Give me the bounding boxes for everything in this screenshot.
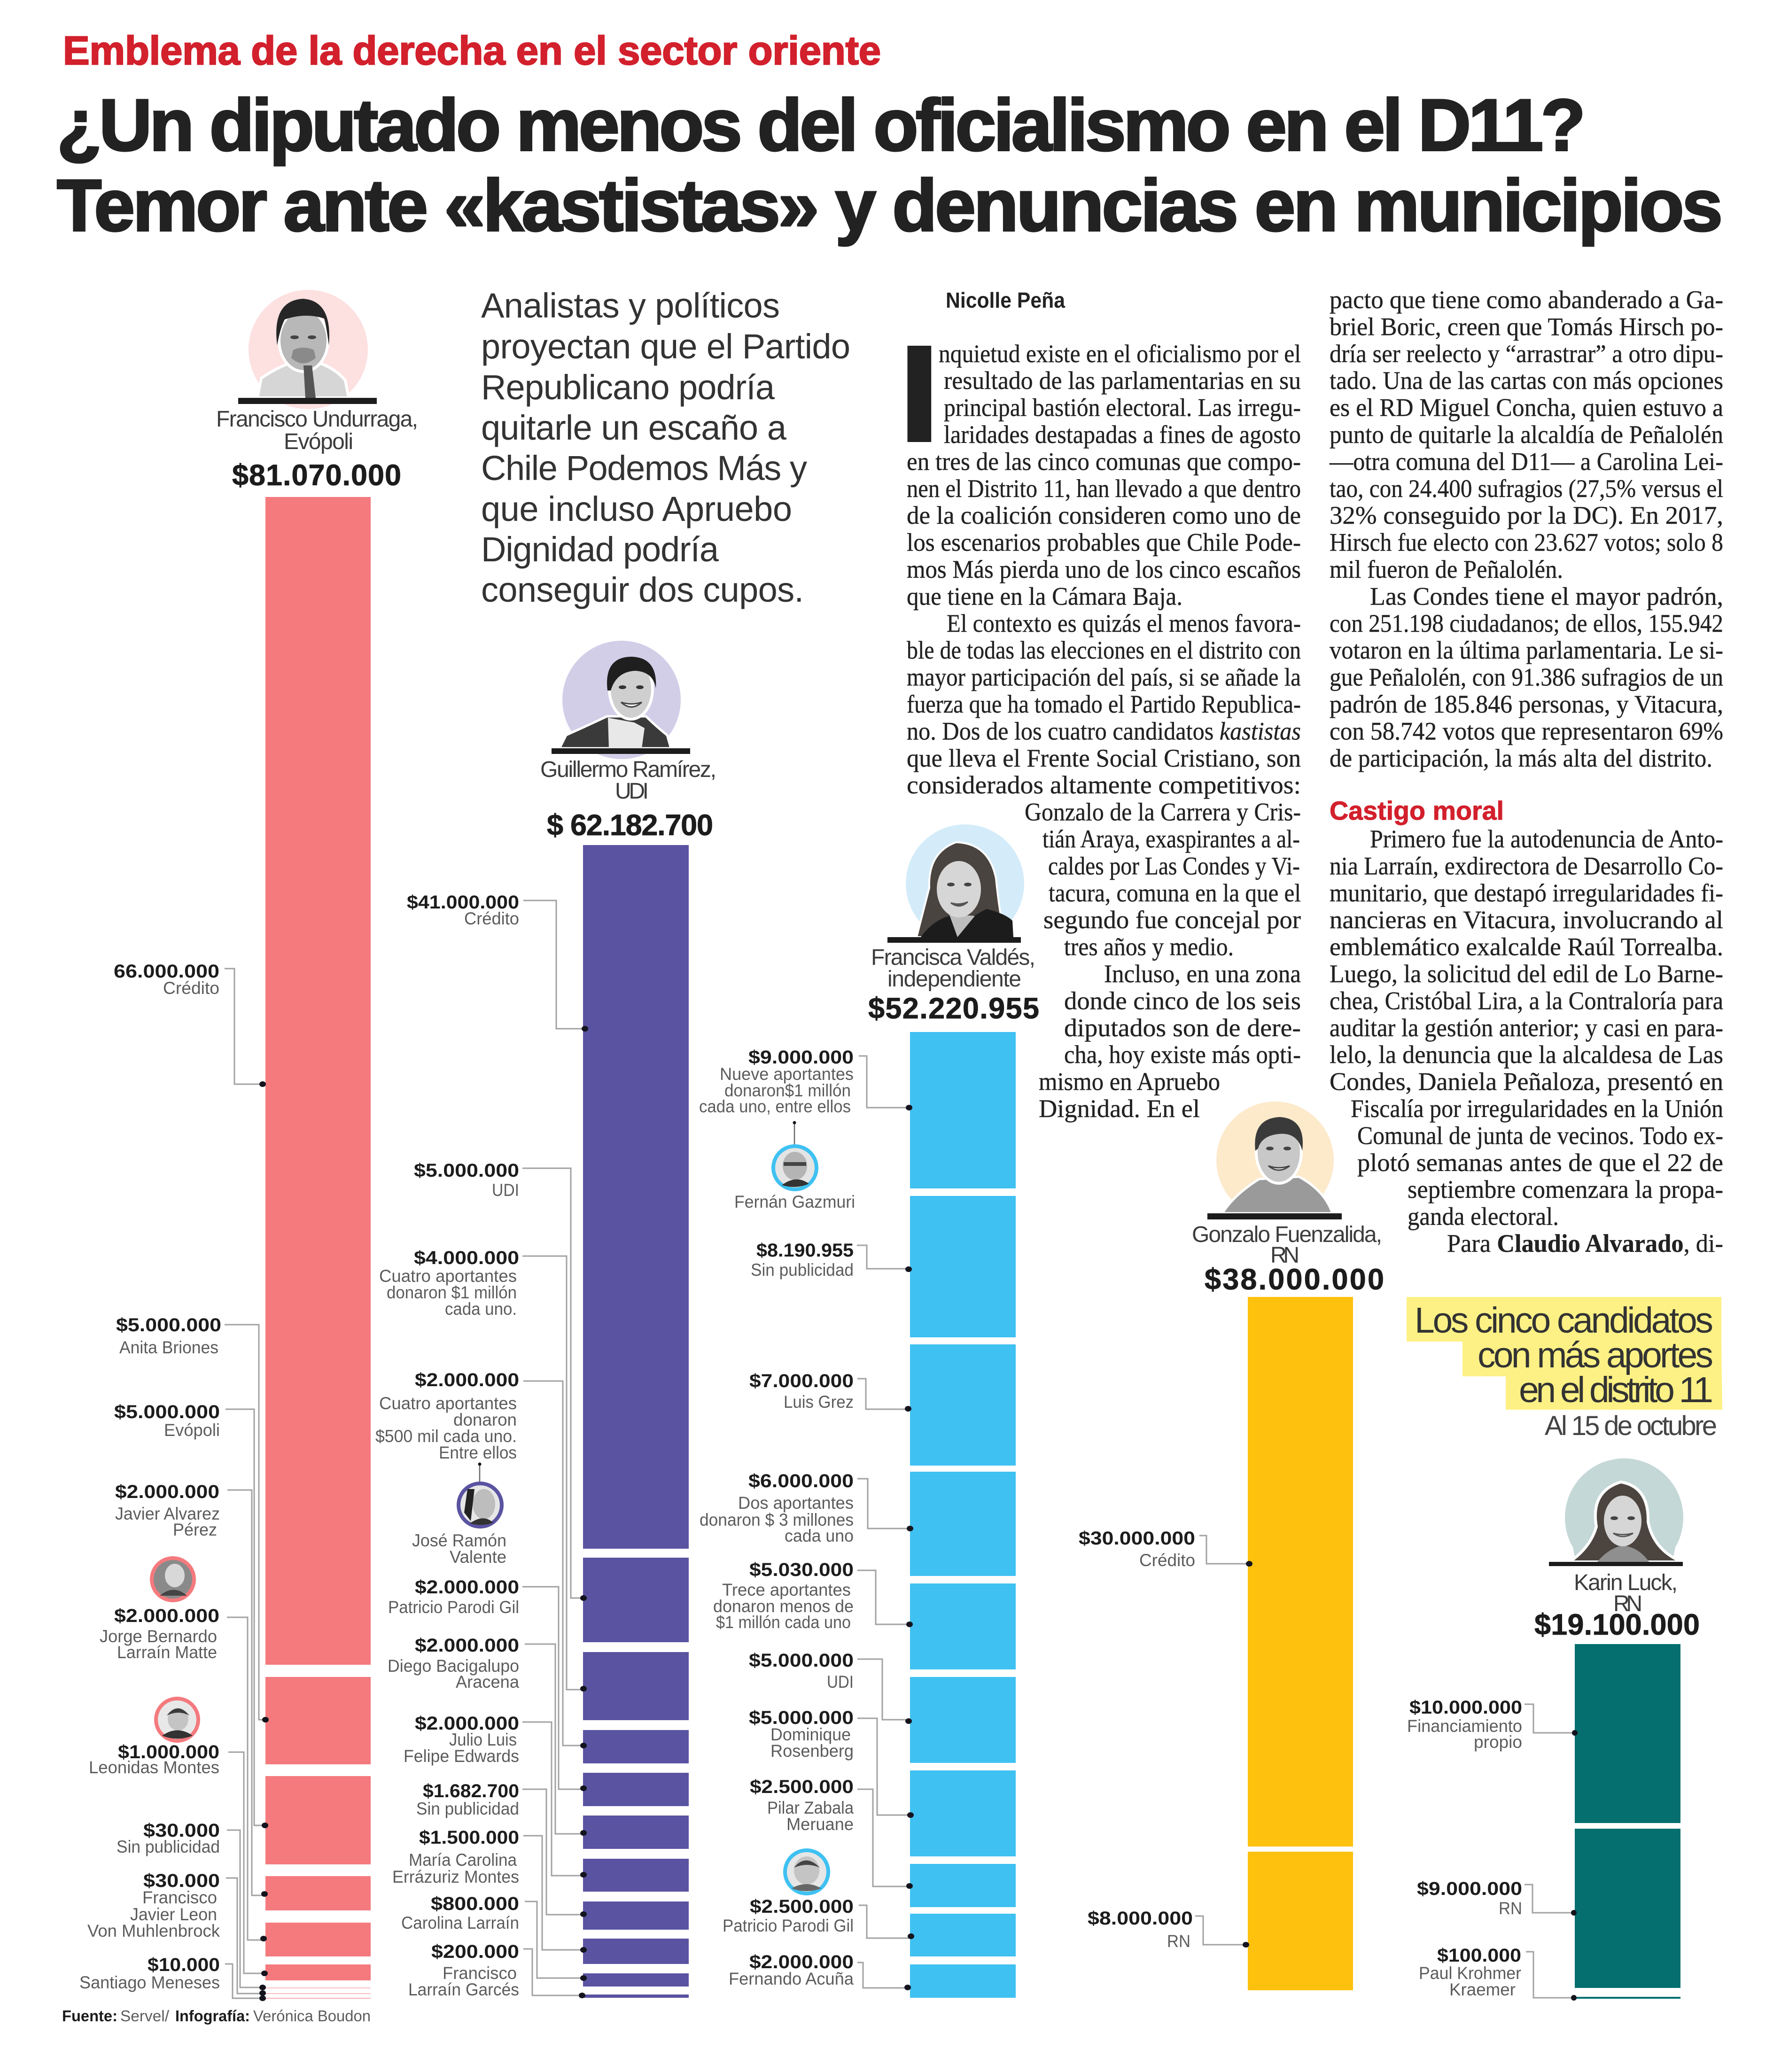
callout: cuatro aportantes $500 mil: Cuatro aportantes: [379, 1394, 517, 1413]
callout: dos aportantes: $6.000.000: [748, 1471, 854, 1491]
name: [871, 945, 1035, 992]
callout: crédito: Crédito: [1139, 1551, 1195, 1570]
callout: nueve aportantes: [699, 1047, 912, 1116]
kicker: Emblema de la derecha en el sector oriente: [63, 29, 881, 73]
article column 1: Dignidad. En el: [1039, 1094, 1200, 1123]
article column 1: los escenarios probables que Chile Pode-: [907, 528, 1301, 557]
intro text block: Republicano podría: [481, 368, 775, 407]
callout: Paul Krohmer Kraemer: [1419, 1945, 1577, 2001]
callout: María Carolina Errázuriz Montes: María Carolina: [409, 1850, 517, 1870]
source credit: Fuente:: [62, 2007, 117, 2025]
callout: sin publicidad: $8.190.955: [756, 1240, 854, 1261]
callout: Sin publicidad: [117, 1820, 266, 1990]
callout: Anita Briones: $5.000.000: [116, 1315, 221, 1335]
callout: crédito: $41.000.000: [407, 892, 519, 913]
article column 1: diputados son de dere-: [1064, 1014, 1301, 1042]
article column 2: 32% conseguido por la DC). En 2017,: [1330, 501, 1723, 529]
source credit: Infografía:: [175, 2007, 250, 2025]
stacked bar: Luck: [1575, 1644, 1680, 1999]
article column 1: Incluso, en una zona: [1104, 960, 1301, 988]
intro text block: [481, 286, 850, 609]
intro text block: Dignidad podría: [481, 530, 719, 569]
callout: Patricio Parodi Gil: $2.500.000: [750, 1896, 854, 1917]
icon: donor photo Leonidas Montes: [154, 1697, 200, 1743]
panel: Karin Luck: [1407, 1459, 1700, 2001]
callout: Patricio Parodi Gil: Patricio Parodi Gil: [723, 1916, 854, 1935]
article column 1: tres años y medio.: [1064, 933, 1234, 961]
callout: Pilar Zabala Meruane: Meruane: [786, 1815, 854, 1834]
callout: Julio Luis Felipe Edwards: [404, 1713, 587, 1878]
callout: Leonidas Montes: Leonidas Montes: [89, 1758, 219, 1777]
callout: Julio Luis Felipe Edwards: Felipe Edwards: [404, 1746, 519, 1766]
callout: Luis Grez: [749, 1371, 911, 1412]
callout: Patricio Parodi Gil: [723, 1896, 914, 1939]
panel: Francisca Valdés: [699, 824, 1039, 1998]
callout: Evópoli: $5.000.000: [114, 1402, 220, 1422]
callout: dos aportantes: cada uno: [785, 1526, 854, 1545]
callout: Anita Briones: [116, 1315, 269, 1723]
chart heading with highlight: Los cinco candidatos: [1415, 1300, 1713, 1341]
stacked bar: Fuenzalida: [1248, 1297, 1353, 1990]
total amount: $38.000.000: [1205, 1263, 1384, 1296]
article column 2: emblemático exalcalde Raúl Torrealba.: [1330, 933, 1723, 961]
article column 2: padrón de 185.846 personas, y Vitacura,: [1330, 690, 1723, 718]
article column 1: caldes por Las Condes y Vi-: [1048, 852, 1300, 880]
article column 1: nen el Distrito 11, han llevado a que dentro: [907, 474, 1301, 503]
callout: Jorge Bernardo Larraín Matte: $2.000.000: [114, 1606, 219, 1626]
article column 2: Luego, la solicitud del edil de Lo Barne-: [1330, 960, 1723, 988]
callout: RN: [1417, 1878, 1577, 1918]
title: Temor ante «kastistas» y denuncias en municipios: [57, 165, 1723, 247]
article column 2: Condes, Daniela Peñaloza, presentó en: [1330, 1068, 1723, 1096]
article column 1: ble de todas las elecciones en el distrito con: [907, 636, 1301, 664]
article column 1: tacura, comuna en la que el: [1049, 879, 1301, 907]
name: independiente: [887, 967, 1021, 992]
name: Francisco Undurraga,: [216, 407, 418, 432]
callout: UDI: $5.000.000: [749, 1650, 854, 1671]
name: [1192, 1222, 1382, 1268]
article column 1: considerados altamente competitivos:: [907, 771, 1301, 799]
chart heading with highlight: en el distrito 11: [1519, 1370, 1713, 1410]
article column 2: lelo, la denuncia que la alcaldesa de Las: [1330, 1040, 1723, 1069]
article column 2: de participación, la más alta del distrito.: [1330, 744, 1712, 772]
article column 2: briel Boric, creen que Tomás Hirsch po-: [1330, 312, 1723, 341]
article column 2: gue Peñalolén, con 91.386 sufragios de un: [1330, 663, 1723, 691]
name: UDI: [615, 779, 649, 804]
date note: Al 15 de octubre: [1545, 1411, 1717, 1441]
callout: Jorge Bernardo Larraín Matte: Larraín Matte: [117, 1643, 217, 1662]
article column 1: mayor participación del país, si se añade la: [907, 663, 1301, 691]
article column 2: chea, Cristóbal Lira, a la Contraloría para: [1330, 986, 1723, 1015]
icon: donor photo Patricio Parodi: [783, 1848, 830, 1895]
article column 2: dría ser reelecto y “arrastrar” a otro dipu-: [1330, 340, 1723, 368]
callout: Jorge Bernardo Larraín Matte: Jorge Bernardo: [100, 1627, 217, 1646]
title: ¿Un diputado menos del oficialismo en el D11?: [57, 85, 1586, 166]
callout: Francisco Javier Leon Von Muhlenbrock: $30.000: [143, 1870, 220, 1891]
name: Francisca Valdés,: [871, 945, 1035, 970]
callout: nueve aportantes: $9.000.000: [748, 1047, 854, 1068]
callout: Patricio Parodi Gil: $2.000.000: [415, 1577, 519, 1598]
callout: RN: $9.000.000: [1417, 1878, 1522, 1899]
portrait: Guillermo Ramírez: [552, 641, 690, 759]
callout: crédito: [1079, 1528, 1252, 1570]
article column 2: tado. Una de las cartas con más opciones: [1330, 366, 1723, 395]
callout: financiamiento propio: propio: [1474, 1732, 1522, 1752]
article column 2: munitario, que destapó irregularidades fi-: [1330, 879, 1723, 907]
callout: Sin publicidad: Sin publicidad: [416, 1799, 519, 1818]
article column 2: —otra comuna del D11— a Carolina Lei-: [1329, 447, 1723, 475]
total amount: $52.220.955: [868, 992, 1039, 1025]
article column 2: plotó semanas antes de que el 22 de: [1357, 1149, 1723, 1177]
callout: Francisco Larraín Garcés: [408, 1941, 585, 1999]
callout: Julio Luis Felipe Edwards: Julio Luis: [449, 1730, 517, 1749]
article column 2: pacto que tiene como abanderado a Ga-: [1330, 286, 1723, 314]
portrait: Karin Luck: [1549, 1459, 1683, 1566]
callout: crédito: $30.000.000: [1079, 1528, 1195, 1549]
callout: Dominique Rosenberg: $5.000.000: [749, 1707, 854, 1728]
callout: Santiago Meneses: $10.000: [148, 1955, 220, 1975]
name: Evópoli: [284, 429, 353, 454]
callout: Carolina Larraín: Carolina Larraín: [401, 1913, 519, 1932]
callout: sin publicidad: Sin publicidad: [751, 1260, 854, 1280]
callout: Francisco Javier Leon Von Muhlenbrock: Francisco: [142, 1888, 217, 1907]
callout: UDI: UDI: [827, 1672, 854, 1692]
callout: cuatro aportantes $1 millón: $4.000.000: [414, 1248, 519, 1268]
article column 1: en tres de las cinco comunas que compo-: [907, 447, 1301, 475]
subheading: Castigo moral: [1330, 796, 1504, 825]
article column 1: Gonzalo de la Carrera y Cris-: [1025, 798, 1301, 826]
article column 2: tao, con 24.400 sufragios (27,5% versus el: [1330, 474, 1723, 503]
callout: trece aportantes: $1 millón cada uno: [716, 1613, 851, 1632]
article column 2: ganda electoral.: [1408, 1203, 1559, 1231]
callout: RN: [1088, 1908, 1249, 1951]
panel: Guillermo Ramírez: [375, 641, 716, 1999]
portrait: Francisca Valdés: [887, 824, 1024, 943]
callout: Diego Bacigalupo Aracena: $2.000.000: [415, 1635, 519, 1656]
name: [216, 407, 418, 454]
callout: cuatro aportantes $1 millón: Cuatro aportantes: [379, 1266, 517, 1286]
callout: Sin publicidad: [416, 1781, 587, 1917]
callout: cuatro aportantes $1 millón: [379, 1248, 587, 1692]
article column 2: es el RD Miguel Concha, quien estuvo a: [1330, 394, 1723, 422]
callout: UDI: UDI: [492, 1180, 519, 1200]
callout: Anita Briones: Anita Briones: [119, 1338, 218, 1357]
portrait: Undurraga: [238, 290, 377, 409]
article column 1: segundo fue concejal por: [1043, 906, 1301, 934]
article column 2: mil fueron de Peñalolén.: [1330, 555, 1563, 583]
callout: Leonidas Montes: $1.000.000: [118, 1742, 219, 1762]
callout: Sin publicidad: $1.682.700: [423, 1781, 519, 1801]
callout: Pilar Zabala Meruane: [750, 1777, 913, 1889]
article column 2: con 251.198 ciudadanos; de ellos, 155.942: [1330, 609, 1723, 637]
article column 2: Para Claudio Alvarado, di-: [1447, 1229, 1723, 1257]
callout: Patricio Parodi Gil: [388, 1577, 587, 1791]
callout: Paul Krohmer Kraemer: Paul Krohmer: [1419, 1963, 1521, 1983]
source credit: Servel/: [120, 2007, 170, 2025]
callout: Fernando Acuña: [729, 1952, 911, 1990]
article column 2: Comunal de junta de vecinos. Todo ex-: [1357, 1121, 1723, 1149]
intro text block: proyectan que el Partido: [481, 327, 850, 366]
callout: financiamiento propio: [1407, 1697, 1578, 1752]
callout: María Carolina Errázuriz Montes: Errázuriz Montes: [392, 1867, 519, 1886]
callout: Javier Alvarez Pérez: Pérez: [173, 1520, 217, 1539]
donor name: José Ramón: [412, 1531, 506, 1550]
callout: Francisco Larraín Garcés: Larraín Garcés: [408, 1980, 519, 1999]
callout: financiamiento propio: $10.000.000: [1409, 1697, 1522, 1718]
callout: Luis Grez: Luis Grez: [784, 1392, 854, 1412]
callout: Dominique Rosenberg: [749, 1707, 914, 1818]
callout: cuatro aportantes $500 mil: donaron: [453, 1410, 517, 1429]
icon: donor photo Fernán Gazmuri: [771, 1121, 818, 1191]
name: [540, 757, 716, 804]
callout: UDI: [414, 1160, 587, 1601]
panel: Gonzalo Fuenzalida: [1079, 1102, 1384, 1990]
name: Guillermo Ramírez,: [540, 757, 716, 782]
callout: dos aportantes: donaron $ 3 millones: [700, 1510, 854, 1529]
chart heading with highlight: [1407, 1297, 1722, 1441]
callout: Javier Alvarez Pérez: Javier Alvarez: [115, 1504, 220, 1523]
intro text block: quitarle un escaño a: [481, 408, 787, 447]
callout: crédito: [407, 892, 588, 1032]
chart heading with highlight: con más aportes: [1478, 1335, 1713, 1375]
callout: Jorge Bernardo Larraín Matte: [100, 1606, 267, 1941]
callout: financiamiento propio: Financiamiento: [1407, 1716, 1522, 1736]
callout: cuatro aportantes $500 mil: $500 mil cada uno.: [375, 1427, 517, 1446]
source credit: Verónica Boudon: [253, 2007, 371, 2025]
callout: Evópoli: Evópoli: [164, 1420, 220, 1440]
callout: sin publicidad: [751, 1240, 912, 1280]
article column 1: fuerza que ha tomado el Partido Republica-: [907, 690, 1301, 718]
callout: Francisco Javier Leon Von Muhlenbrock: Von Muhlenbrock: [87, 1921, 220, 1940]
callout: cuatro aportantes $500 mil: $2.000.000: [415, 1370, 519, 1390]
article column 2: [1329, 286, 1723, 1257]
callout: Fernando Acuña: Fernando Acuña: [729, 1969, 854, 1988]
callout: Pilar Zabala Meruane: Pilar Zabala: [767, 1798, 854, 1817]
article column 1: principal bastión electoral. Las irregu-: [944, 394, 1301, 422]
article column 1: resultado de las parlamentarias en su: [944, 366, 1301, 395]
callout: Sin publicidad: $30.000: [143, 1820, 220, 1841]
article column 1: mismo en Apruebo: [1039, 1068, 1220, 1096]
total amount: $81.070.000: [232, 459, 401, 492]
article column 1: laridades destapadas a fines de agosto: [944, 420, 1301, 449]
article column 1: donde cinco de los seis: [1064, 986, 1301, 1015]
callout: trece aportantes: [713, 1560, 913, 1632]
total amount: $19.100.000: [1534, 1608, 1700, 1641]
article column 1: El contexto es quizás el menos favora-: [947, 609, 1301, 637]
article column 1: que lleva el Frente Social Cristiano, son: [907, 744, 1301, 772]
article column 1: nquietud existe en el oficialismo por el: [939, 340, 1301, 368]
article column 2: punto de quitarle la alcaldía de Peñalolén: [1330, 420, 1723, 449]
callout: 66.000.000 crédito: 66.000.000: [114, 961, 219, 982]
article column 2: nancieras en Vitacura, involucrando al: [1330, 906, 1723, 934]
callout: Dominique Rosenberg: Dominique: [770, 1725, 851, 1744]
callout: dos aportantes: [700, 1471, 913, 1545]
callout: Carolina Larraín: $800.000: [431, 1894, 519, 1914]
article column 1: cha, hoy existe más opti-: [1064, 1040, 1301, 1069]
article column 1: tián Araya, exaspirantes a al-: [1042, 825, 1300, 853]
callout: trece aportantes: Trece aportantes: [722, 1580, 851, 1599]
article column 2: con 58.742 votos que representaron 69%: [1330, 717, 1723, 745]
callout: dos aportantes: Dos aportantes: [738, 1493, 854, 1513]
callout: Pilar Zabala Meruane: $2.500.000: [750, 1777, 854, 1797]
total amount: $ 62.182.700: [547, 809, 713, 842]
callout: Fernando Acuña: $2.000.000: [749, 1952, 854, 1972]
article column 2: Hirsch fue electo con 23.627 votos; solo 8: [1330, 528, 1723, 557]
article column 2: nia Larraín, exdirectora de Desarrollo Co-: [1330, 852, 1723, 880]
callout: Javier Alvarez Pérez: [115, 1482, 268, 1897]
stacked bar: Ramírez: [583, 845, 689, 1998]
callout: trece aportantes: $5.030.000: [749, 1560, 854, 1580]
callout: 66.000.000 crédito: Crédito: [163, 978, 219, 998]
icon: donor photo Jorge Bernardo: [150, 1556, 196, 1602]
byline: Nicolle Peña: [946, 288, 1065, 312]
callout: Julio Luis Felipe Edwards: $2.000.000: [415, 1713, 519, 1734]
callout: María Carolina Errázuriz Montes: [392, 1827, 587, 1953]
article column 1: de la coalición consideren como uno de: [907, 501, 1301, 529]
source credit: [62, 2007, 371, 2025]
intro text block: Analistas y políticos: [481, 286, 780, 325]
article column 1: no. Dos de los cuatro candidatos kastistas: [907, 717, 1301, 745]
intro text block: conseguir dos cupos.: [481, 570, 804, 609]
callout: 66.000.000 crédito: [114, 961, 266, 1087]
callout: Evópoli: [114, 1402, 268, 1828]
name: RN: [1270, 1243, 1299, 1268]
callout: Paul Krohmer Kraemer: Kraemer: [1449, 1980, 1516, 1999]
icon: donor photo José Ramón Valente: [457, 1463, 504, 1529]
stacked bar: Valdés: [910, 1032, 1016, 1998]
callout: Francisco Javier Leon Von Muhlenbrock: Javier Leon: [130, 1905, 217, 1924]
donor name: Valente: [450, 1547, 506, 1567]
intro text block: Chile Podemos Más y: [481, 449, 807, 488]
callout: crédito: Crédito: [464, 909, 519, 928]
callout: nueve aportantes: Nueve aportantes: [720, 1064, 854, 1084]
callout: RN: RN: [1167, 1932, 1190, 1951]
callout: Santiago Meneses: Santiago Meneses: [79, 1973, 220, 1992]
callout: cuatro aportantes $1 millón: cada uno.: [445, 1299, 517, 1319]
article column 1: mos Más pierda uno de los cinco escaños: [907, 555, 1301, 583]
donor name: Fernán Gazmuri: [734, 1192, 855, 1211]
callout: UDI: [749, 1650, 912, 1724]
callout: Diego Bacigalupo Aracena: [388, 1635, 587, 1836]
panel: Francisco Undurraga: [79, 290, 418, 2001]
callout: Sin publicidad: Sin publicidad: [117, 1837, 220, 1856]
callout: Javier Alvarez Pérez: $2.000.000: [115, 1482, 219, 1502]
callout: Francisco Larraín Garcés: $200.000: [431, 1941, 519, 1962]
name: RN: [1613, 1591, 1642, 1616]
callout: nueve aportantes: cada uno, entre ellos: [699, 1097, 851, 1116]
article column 2: septiembre comenzara la propa-: [1408, 1175, 1723, 1203]
callout: cuatro aportantes $500 mil: [375, 1370, 587, 1748]
donor name: [412, 1531, 506, 1567]
callout: Francisco Larraín Garcés: Francisco: [443, 1963, 517, 1983]
article column 2: auditar la gestión anterior; y casi en para-: [1330, 1014, 1723, 1042]
name: [1574, 1570, 1678, 1616]
callout: Leonidas Montes: [89, 1742, 268, 1976]
name: Gonzalo Fuenzalida,: [1192, 1222, 1382, 1247]
callout: cuatro aportantes $1 millón: donaron $1 millón: [387, 1283, 517, 1302]
callout: Diego Bacigalupo Aracena: Aracena: [456, 1672, 519, 1692]
callout: trece aportantes: donaron menos de: [713, 1597, 854, 1616]
portrait: Gonzalo Fuenzalida: [1207, 1102, 1342, 1219]
drop cap: I: [896, 316, 942, 472]
callout: Patricio Parodi Gil: Patricio Parodi Gil: [388, 1598, 519, 1617]
article column 2: Fiscalía por irregularidades en la Unión: [1351, 1094, 1723, 1123]
callout: RN: $8.000.000: [1088, 1908, 1193, 1929]
name: Karin Luck,: [1574, 1570, 1678, 1595]
callout: Dominique Rosenberg: Rosenberg: [770, 1741, 854, 1761]
title: [57, 85, 1723, 247]
article column 1: que tiene en la Cámara Baja.: [907, 582, 1182, 610]
callout: Santiago Meneses: [79, 1955, 266, 2001]
callout: Diego Bacigalupo Aracena: Diego Bacigalupo: [388, 1656, 519, 1676]
intro text block: que incluso Apruebo: [481, 489, 792, 528]
article column 2: Las Condes tiene el mayor padrón,: [1370, 582, 1723, 610]
callout: Carolina Larraín: [401, 1894, 587, 1981]
article column 2: Primero fue la autodenuncia de Anto-: [1370, 825, 1723, 853]
callout: UDI: $5.000.000: [414, 1160, 519, 1181]
stacked bar: Undurraga: [265, 497, 371, 1999]
callout: Paul Krohmer Kraemer: $100.000: [1437, 1945, 1521, 1966]
callout: Luis Grez: $7.000.000: [749, 1371, 854, 1391]
callout: María Carolina Errázuriz Montes: $1.500.000: [419, 1827, 519, 1848]
article column 1: [896, 316, 1301, 1123]
callout: Francisco Javier Leon Von Muhlenbrock: [87, 1870, 266, 1996]
callout: nueve aportantes: donaron$1 millón: [724, 1081, 851, 1100]
callout: cuatro aportantes $500 mil: Entre ellos: [439, 1443, 517, 1462]
article column 2: votaron en la última parlamentaria. Le si-: [1330, 636, 1723, 664]
callout: RN: RN: [1499, 1899, 1522, 1918]
